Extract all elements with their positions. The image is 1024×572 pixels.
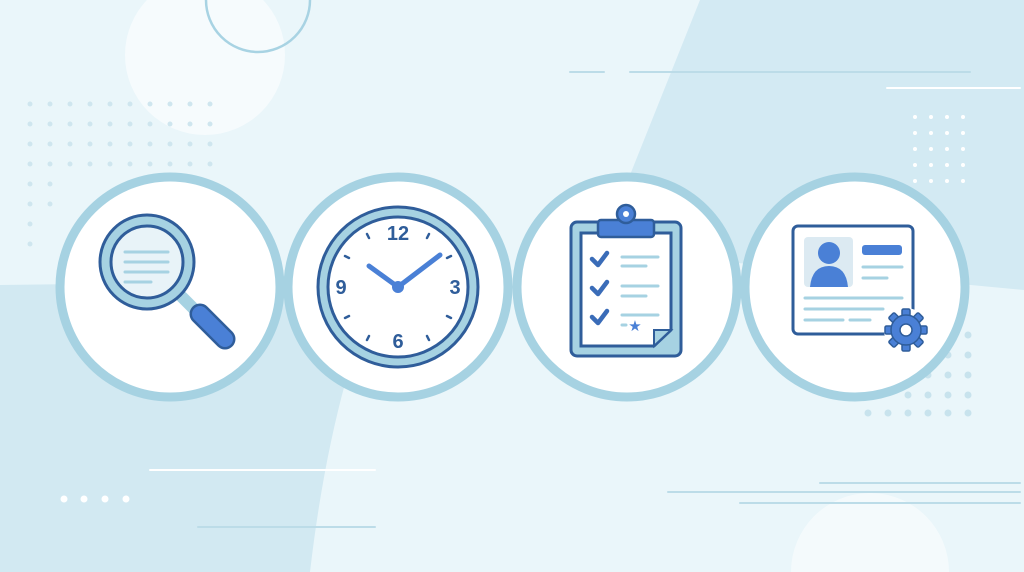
icon: clock: 6 (392, 331, 404, 353)
icon: clock (318, 207, 478, 367)
icon: clock: 12 (387, 223, 409, 245)
panel: magnifier (60, 177, 280, 397)
icon: clipboard checklist: ★ (628, 318, 642, 335)
panel: clock (288, 177, 508, 397)
icon: clipboard checklist (571, 205, 681, 356)
icon: magnifying glass (100, 215, 225, 339)
icon: clock: 9 (335, 277, 347, 299)
icon: ID card with gear (793, 226, 928, 352)
icon: clock: 3 (449, 277, 461, 299)
panel: clipboard (517, 177, 737, 397)
panel: profile card (745, 177, 965, 397)
